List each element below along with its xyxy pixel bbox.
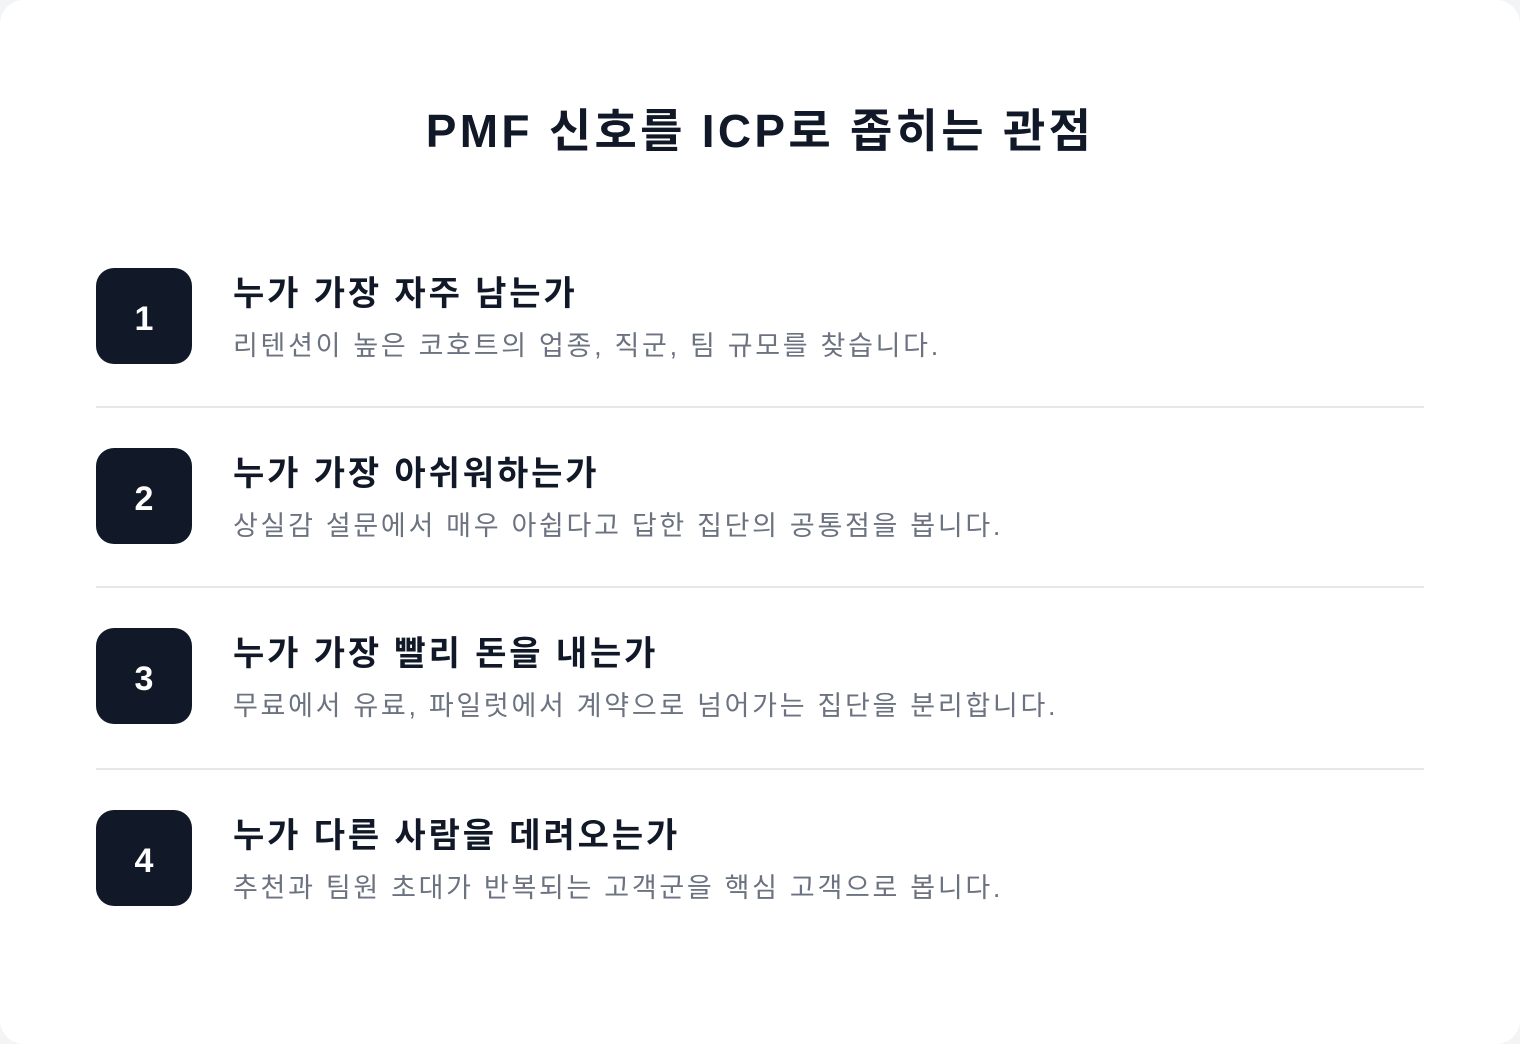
item 4 <box>96 810 1003 906</box>
badge 1: 1 <box>135 300 153 338</box>
badge 2: 2 <box>135 480 153 518</box>
badge 4 <box>96 810 192 906</box>
item 3 <box>96 628 1058 724</box>
item 1 <box>96 268 941 364</box>
text 2: 상실감 설문에서 매우 아쉽다고 답한 집단의 공통점을 봅니다. <box>233 511 1003 541</box>
badge 3: 3 <box>135 660 153 698</box>
badge 2 <box>96 448 192 544</box>
heading 1: 누가 가장 자주 남는가 <box>233 275 578 313</box>
text 3: 무료에서 유료, 파일럿에서 계약으로 넘어가는 집단을 분리합니다. <box>233 691 1058 721</box>
title: PMF 신호를 ICP로 좁히는 관점 <box>426 105 1094 157</box>
badge 1 <box>96 268 192 364</box>
badge 4: 4 <box>135 842 153 880</box>
heading 2: 누가 가장 아쉬워하는가 <box>233 455 600 493</box>
text 1: 리텐션이 높은 코호트의 업종, 직군, 팀 규모를 찾습니다. <box>233 331 941 361</box>
badge 3 <box>96 628 192 724</box>
text 4: 추천과 팀원 초대가 반복되는 고객군을 핵심 고객으로 봅니다. <box>233 873 1003 903</box>
heading 4: 누가 다른 사람을 데려오는가 <box>233 817 680 855</box>
item 2 <box>96 448 1003 544</box>
heading 3: 누가 가장 빨리 돈을 내는가 <box>233 635 658 673</box>
